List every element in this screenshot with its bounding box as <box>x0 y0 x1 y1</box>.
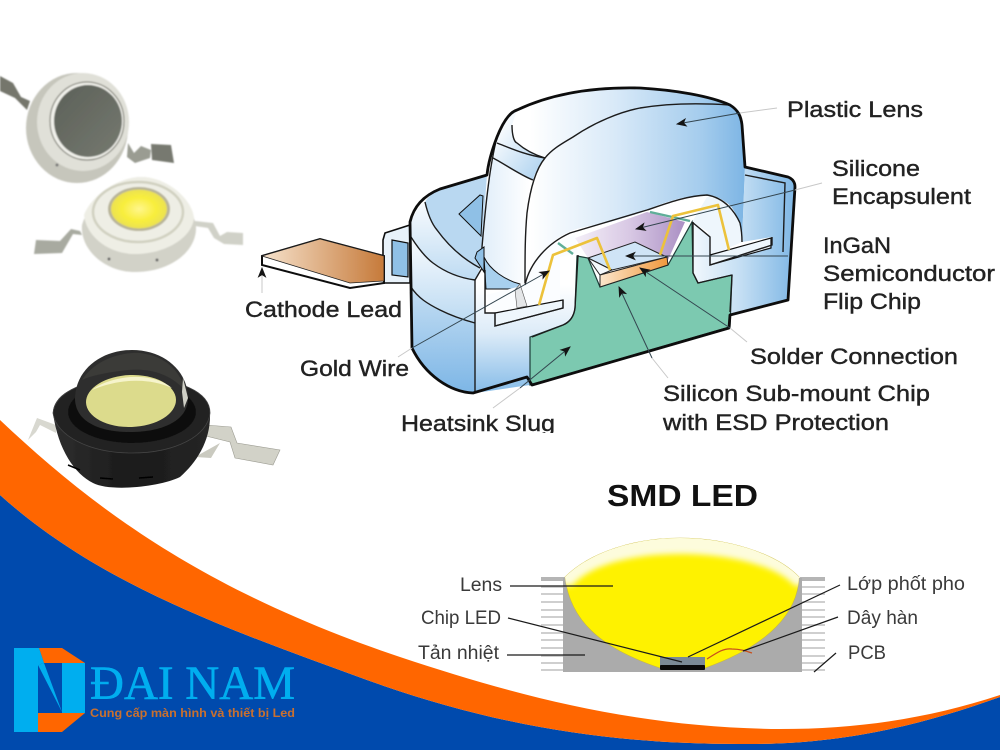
photo: LED with yellow core <box>34 177 243 272</box>
housing rim interior <box>425 175 487 268</box>
background: orange swoosh band <box>0 420 1000 744</box>
outer heavy outline <box>410 88 795 393</box>
photo: LED with grey disc <box>0 73 174 183</box>
logo name: ĐAI NAM <box>90 657 295 710</box>
label: Solder Connection: Solder Connection <box>750 344 958 369</box>
label: Lens: Lens <box>460 575 502 596</box>
encapsulant purple <box>575 212 685 260</box>
lens cap band <box>493 110 545 180</box>
dome highlight <box>565 538 799 590</box>
label: InGaN Semiconductor Flip Chip: InGaN <box>823 233 891 258</box>
bond wire <box>707 649 752 659</box>
logo tagline: Cung cấp màn hình và thiết bị Led <box>90 706 295 720</box>
label: Heatsink Slug: Heatsink Slug <box>401 411 555 436</box>
grey heat-sink block <box>563 578 802 672</box>
label: Silicone Encapsulent <box>832 156 971 209</box>
lens base crescent <box>484 257 520 289</box>
silicon sub-mount green <box>530 222 732 385</box>
flip chip and cavity <box>588 242 668 287</box>
diagram: SMD LED cross-section <box>541 530 825 672</box>
label: Silicon Sub-mount Chip with ESD Protection: with ESD Protection <box>662 410 889 435</box>
diagram: high-power LED cross-section <box>262 88 795 393</box>
label: Chip LED: Chip LED <box>421 608 501 629</box>
label: InGaN Semiconductor Flip Chip <box>823 233 995 314</box>
lens side recess <box>459 195 484 272</box>
label: Lớp phốt pho: Lớp phốt pho <box>847 574 965 595</box>
background: blue lower area <box>0 495 1000 750</box>
heading: SMD LED: SMD LED <box>607 478 758 513</box>
label: InGaN Semiconductor Flip Chip: Semiconductor <box>823 261 995 286</box>
heat fins <box>541 577 825 671</box>
front cut left <box>475 253 578 393</box>
label: PCB: PCB <box>848 643 886 664</box>
pads <box>495 300 563 326</box>
label: Silicon Sub-mount Chip with ESD Protection: Silicon Sub-mount Chip <box>663 381 930 406</box>
teal contact stripes <box>558 212 690 254</box>
arch interior left <box>486 235 578 315</box>
housing middle band <box>411 237 475 323</box>
label: Silicone Encapsulent: Encapsulent <box>832 184 971 209</box>
label: Dây hàn: Dây hàn <box>847 608 918 629</box>
label: Plastic Lens: Plastic Lens <box>787 97 923 122</box>
label: Silicon Sub-mount Chip with ESD Protection <box>662 381 930 435</box>
logo: Đại Nam <box>14 648 295 732</box>
leader lines and arrowheads <box>262 108 822 408</box>
label: Tản nhiệt: Tản nhiệt <box>418 643 500 664</box>
label: Cathode Lead: Cathode Lead <box>245 297 402 322</box>
label: Gold Wire: Gold Wire <box>300 356 409 381</box>
lens dome <box>565 538 799 668</box>
photo: black domed LED <box>28 350 280 488</box>
lens top highlight <box>512 88 730 158</box>
label: InGaN Semiconductor Flip Chip: Flip Chip <box>823 289 921 314</box>
SMD leader lines <box>507 585 840 672</box>
housing upper band <box>411 202 480 282</box>
front cut right <box>692 167 795 315</box>
plastic lens face <box>525 104 745 285</box>
label: Silicone Encapsulent: Silicone <box>832 156 920 181</box>
small lead frame in left cavity <box>515 284 527 308</box>
thin contour lines <box>411 104 785 393</box>
cathode lead <box>262 225 410 288</box>
lens left column <box>482 158 533 285</box>
LED chip <box>660 657 705 670</box>
gold wires <box>539 205 729 305</box>
housing lower band <box>411 287 475 393</box>
logo icon <box>14 648 85 732</box>
arch interior right <box>692 197 742 256</box>
